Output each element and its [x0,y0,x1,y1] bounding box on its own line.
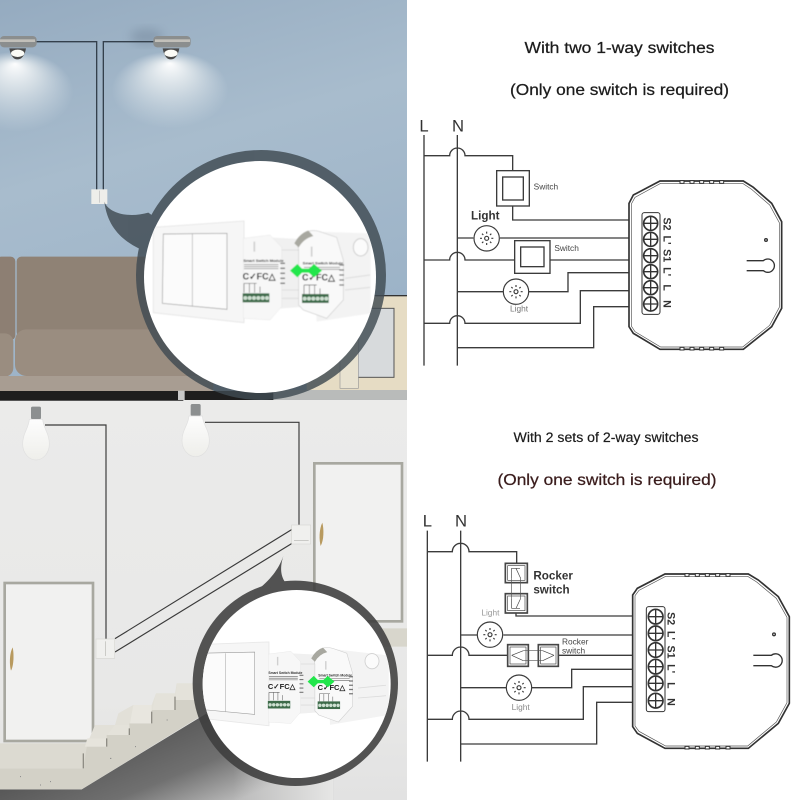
product photo: switch and module: C✓FC△ [302,273,336,283]
light upper [477,622,503,647]
terminal labels: N [665,698,677,706]
scene: living room wall with two lamps [0,0,407,400]
status dot and button [747,239,774,272]
wiring diagram: two sets of 2-way switches [423,512,789,762]
module labels: Smart Switch Module [268,671,302,675]
product photo: switch and module: Smart Switch Module [303,261,344,266]
lamp glow right [118,54,221,120]
rocker switch upper [505,563,527,583]
lamp shadow [130,29,163,45]
switch upper [497,171,529,206]
module labels: Smart Switch Module [243,258,284,263]
label: rocker switch lower: switch [562,646,586,656]
light lower [503,279,529,304]
heading: top diagram title: With two 1-way switches [524,40,715,57]
label: rocker switch upper: switch [533,584,570,597]
green terminal blocks [268,701,290,708]
rocker panels [200,652,255,714]
rocker panels [162,233,227,309]
wiring on wall [35,42,155,191]
wall plate [153,221,244,323]
terminal labels: S2 [660,217,672,231]
terminal labels: S2 [665,612,677,625]
connecting cylinder [274,238,299,308]
terminal labels: S1 [660,249,672,262]
label: rocker switch upper: Rocker [533,569,573,582]
rocker switch left [508,645,528,666]
L and N labels: N [452,116,464,135]
wall lamp left [0,36,37,59]
door right [314,463,402,621]
rocker switch right [538,645,558,666]
terminal labels: L' [665,664,677,673]
stairs [0,683,200,789]
junction box [313,232,371,322]
wall background [0,0,407,400]
scene: staircase with two ceiling bulbs [0,400,407,800]
product photo: switch and module: C✓FC△ [268,682,297,691]
product photo: switch and module: C✓FC△ [318,683,346,692]
green terminal blocks [243,293,269,302]
label: light upper: Light [481,607,500,617]
switch lower [96,639,115,658]
callout pointer and ring [193,556,398,786]
sofa [0,257,215,392]
green arrows [290,264,322,277]
wires [427,531,633,762]
shadow fade to the right [244,772,334,800]
label: light lower: Light [510,304,529,314]
heading: top diagram note: (Only one switch is required) [510,82,729,99]
label: light upper: Light [471,209,500,222]
status dot and button [753,633,782,667]
product photo: switch and module [193,642,389,726]
label: rocker switch lower [562,636,589,656]
terminal labels: L' [660,267,672,276]
picture frames [307,295,407,390]
smart module [633,574,789,749]
product photo: switch and module [153,221,371,323]
L and N labels: N [455,512,467,531]
label: rocker switch lower: Rocker [562,636,589,646]
module front [243,235,282,320]
terminal labels: N [660,300,672,308]
light upper [474,226,499,251]
wires [45,422,299,652]
smart module [629,181,782,350]
label: light lower: Light [512,702,530,712]
wall lamp right [153,36,191,59]
heading: bottom diagram title: With 2 sets of 2-way switches [514,430,699,445]
connecting cylinder [289,653,322,714]
terminal labels: L' [665,631,677,640]
light lower [506,675,532,700]
wall plate [193,642,269,726]
callout white circle [144,161,376,393]
product photo: switch and module: Smart Switch Module [318,673,352,677]
terminal labels: S1 [665,645,677,659]
label: rocker switch upper [533,569,573,597]
callout white circle [203,590,391,778]
door left [5,583,93,741]
label: switch lower: Switch [554,243,579,253]
wiring diagram: two 1-way switches [419,116,782,366]
L and N labels [419,116,464,135]
floor [0,390,407,400]
L and N labels: L [423,512,432,531]
terminal strip [642,213,660,314]
terminal labels: L' [660,235,672,245]
L and N labels: L [419,116,429,135]
heading: bottom diagram note: (Only one switch is required) [498,472,716,489]
terminal labels: L [660,284,672,291]
terminal strip [646,607,665,712]
upper landing [382,628,407,646]
junction box [327,648,389,725]
label: switch upper: Switch [534,181,559,191]
bulb right [182,404,209,457]
rocker switch lower [505,594,527,613]
switch upper [292,525,311,544]
under stair shadow [0,713,333,800]
lamp glow left [0,53,66,124]
terminal labels [665,612,677,706]
terminal labels: L [665,682,677,689]
wall switch [91,189,107,204]
wires [424,135,629,366]
top divider [0,400,183,401]
switch lower [515,241,550,273]
module front [268,651,301,723]
L and N labels [423,512,467,531]
bulb left [23,407,49,460]
callout pointer and ring [104,150,386,400]
wall background [0,400,407,800]
terminal labels [660,217,672,308]
product photo: switch and module: C✓FC△ [243,271,277,281]
green arrows [308,676,334,687]
